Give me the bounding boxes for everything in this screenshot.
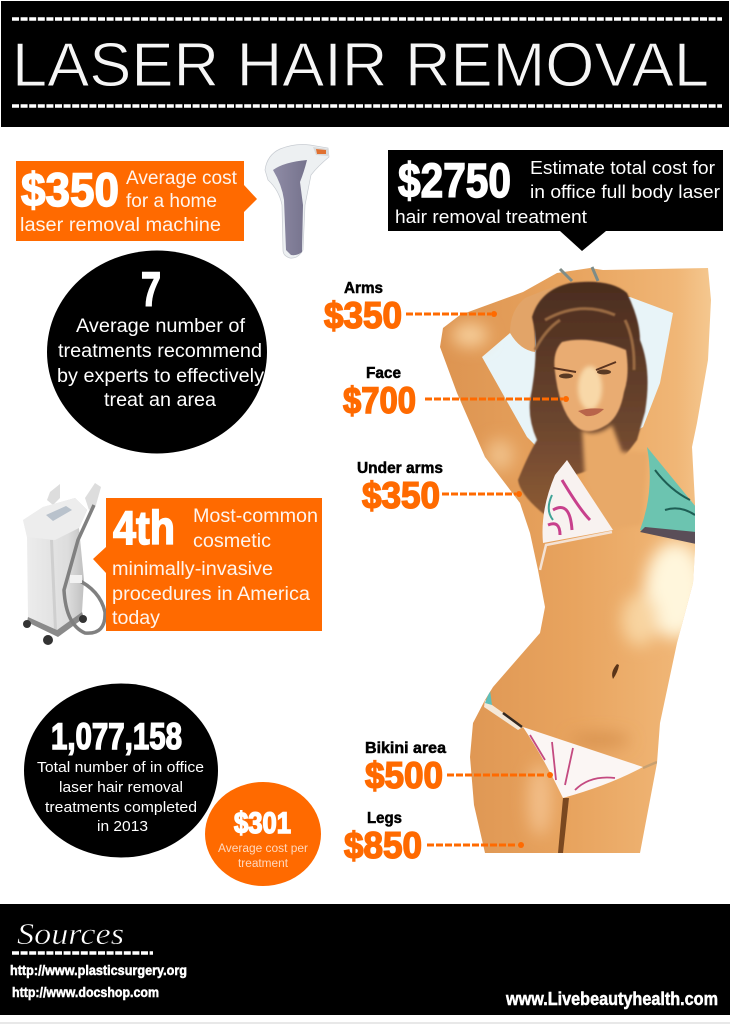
callout: full body treatment cost <box>388 150 723 251</box>
callout: full body treatment cost: hair removal treatment <box>395 207 587 227</box>
header banner: LASER HAIR REMOVAL <box>12 31 709 100</box>
label: arms <box>324 280 497 336</box>
bracelets <box>560 267 598 281</box>
label: under arms: Under arms <box>357 460 443 477</box>
right cup print <box>655 470 695 515</box>
callout: 4th most common procedure: 4th <box>113 501 175 554</box>
eye right <box>597 370 611 374</box>
callout: 4th most common procedure <box>93 498 322 631</box>
circle: total treatments in 2013: treatments completed <box>45 799 197 816</box>
label: legs <box>344 810 524 866</box>
callout: home machine cost: Average cost <box>126 168 238 189</box>
side strap <box>484 700 523 730</box>
sky background <box>482 297 673 445</box>
circle: total treatments in 2013: in 2013 <box>97 818 148 835</box>
face <box>554 340 628 431</box>
strap teal <box>485 690 492 705</box>
circle: total treatments in 2013: laser hair removal <box>59 779 183 796</box>
callout: 4th most common procedure: Most-common <box>193 506 318 527</box>
bikini top left cup <box>542 460 613 543</box>
strap clasp <box>503 713 522 727</box>
label: under arms <box>357 460 522 516</box>
label: legs: $850 <box>344 825 422 866</box>
thigh gap <box>558 798 569 853</box>
label: bikini area: $500 <box>365 755 443 796</box>
hair highlights <box>535 309 634 370</box>
hair <box>518 282 648 515</box>
footer: sources: Sources <box>17 916 124 951</box>
footer: sources: http://www.plasticsurgery.org <box>10 962 187 978</box>
circle: average cost per treatment: Average cost per <box>218 843 308 855</box>
icon: in-office laser machine <box>23 483 105 645</box>
neck and chest <box>579 424 630 472</box>
circle: average cost per treatment <box>205 782 321 886</box>
left cup print <box>548 480 590 535</box>
label: face: $700 <box>343 380 416 421</box>
callout: full body treatment cost: $2750 <box>398 155 511 208</box>
circle: average number of treatments: by experts to effectively <box>57 366 265 387</box>
label: face <box>343 365 569 421</box>
callout: 4th most common procedure: cosmetic <box>193 531 271 552</box>
face highlight <box>578 366 602 410</box>
label: bikini area: Bikini area <box>365 740 446 757</box>
circle: total treatments in 2013: Total number of in office <box>37 759 204 776</box>
photo: woman in bikini <box>430 260 720 860</box>
circle: average cost per treatment: $301 <box>234 807 291 840</box>
bikini bottom <box>523 727 643 798</box>
callout: home machine cost: for a home <box>126 191 217 212</box>
label: legs: Legs <box>367 810 402 827</box>
header banner <box>1 1 729 127</box>
circle: total treatments in 2013: 1,077,158 <box>51 716 182 757</box>
circle: average cost per treatment: treatment <box>238 858 289 870</box>
circle: total treatments in 2013 <box>24 684 218 858</box>
lips <box>578 408 604 416</box>
footer: sources <box>0 904 730 1015</box>
skin highlights <box>452 323 705 836</box>
label: arms: $350 <box>324 295 402 336</box>
circle: average number of treatments: 7 <box>141 264 161 317</box>
bikini bottom print <box>530 735 615 790</box>
hand <box>510 285 560 352</box>
callout: home machine cost: laser removal machine <box>20 215 221 236</box>
footer: sources: http://www.docshop.com <box>12 984 159 1000</box>
icon: handheld laser device <box>265 144 329 258</box>
label: bikini area <box>365 740 553 796</box>
bikini top right cup <box>640 447 695 532</box>
label: face: Face <box>366 365 401 382</box>
callout: full body treatment cost: Estimate total cost for <box>530 158 715 178</box>
callout: full body treatment cost: in office full body laser <box>530 182 720 202</box>
callout: 4th most common procedure: minimally-invasive <box>112 559 273 580</box>
brows <box>553 362 616 372</box>
label: under arms: $350 <box>362 475 440 516</box>
right strap <box>643 762 657 768</box>
eye left <box>559 374 573 378</box>
circle: average number of treatments: treat an area <box>104 390 216 411</box>
callout: 4th most common procedure: procedures in America <box>112 584 310 605</box>
circle: average number of treatments <box>47 250 267 454</box>
left cup teal print <box>549 495 553 520</box>
bikini band <box>540 532 612 570</box>
callout: home machine cost <box>16 161 257 241</box>
navel <box>612 664 619 679</box>
circle: average number of treatments: Average number of <box>76 316 246 337</box>
right cup trim <box>640 527 696 544</box>
callout: home machine cost: $350 <box>21 163 119 216</box>
label: arms: Arms <box>344 280 383 297</box>
callout: 4th most common procedure: today <box>112 608 161 629</box>
circle: average number of treatments: treatments recommend <box>58 341 262 362</box>
